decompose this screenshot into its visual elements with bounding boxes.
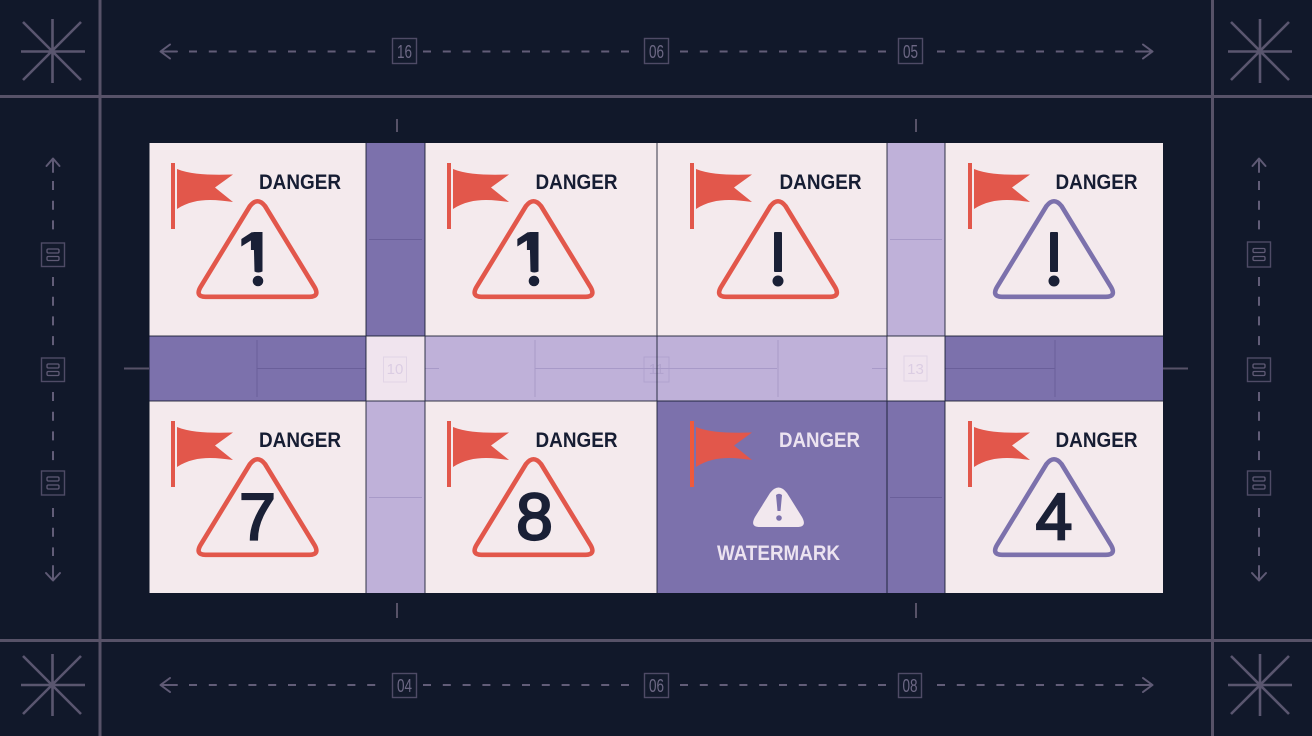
gutter: upper right light [887, 143, 945, 336]
junction: right [887, 336, 945, 401]
icon: warning triangle [995, 201, 1113, 297]
band: centre light [425, 336, 887, 401]
heading: DANGER [1056, 429, 1138, 452]
label box 05: 05 [903, 42, 918, 62]
label box upper right [1248, 242, 1270, 267]
label box 06 lower: 06 [649, 676, 664, 696]
right dimension line [1248, 158, 1270, 580]
icon: flag [690, 421, 752, 487]
gutter: lower left light [366, 401, 425, 593]
gutter: upper left dark [366, 143, 425, 336]
top dimension line [160, 38, 1152, 64]
numeral 4: 4 [1036, 480, 1072, 554]
icon: flag [968, 163, 1030, 229]
label box 08: 08 [902, 676, 918, 696]
icon: star top-left [21, 19, 85, 83]
junction: left [366, 336, 425, 401]
icon: filled warning [753, 488, 804, 527]
left dimension line [42, 158, 64, 580]
exclamation mark [1048, 232, 1060, 286]
card 2: danger 1 [447, 163, 618, 297]
card 3: danger exclamation [690, 163, 862, 303]
bottom dimension line [160, 674, 1152, 698]
icon: flag [447, 163, 509, 229]
icon: star top-right [1228, 19, 1292, 83]
card 7: watermark [690, 421, 860, 565]
exclamation mark [772, 232, 784, 286]
card 4: danger exclamation purple [968, 163, 1138, 303]
band: right dark [945, 336, 1163, 401]
icon: flag [968, 421, 1030, 487]
faint label 13 [904, 356, 927, 381]
heading: DANGER [779, 429, 860, 452]
numeral 1 [241, 232, 264, 286]
icon: warning triangle [475, 201, 592, 297]
exclamation mark: ! [767, 217, 789, 303]
numeral 1: 1 [514, 221, 546, 286]
exclamation mark: ! [1043, 217, 1065, 303]
numeral 7: 7 [239, 480, 276, 554]
watermark label: WATERMARK [717, 542, 840, 565]
heading: DANGER [259, 429, 341, 452]
icon: warning triangle [719, 201, 837, 297]
crop ticks [124, 119, 1188, 618]
icon: warning triangle [199, 201, 316, 297]
label box middle [42, 358, 64, 382]
label box lower right [1248, 471, 1270, 495]
card 8: danger 4 [968, 421, 1138, 555]
panel: grid backing [150, 143, 1163, 593]
card 1: danger 1 [171, 163, 341, 297]
icon: flag [690, 163, 752, 229]
label box middle right [1248, 358, 1270, 382]
faint label 11 [644, 357, 669, 382]
label box 06: 06 [649, 42, 664, 62]
grid cut lines [150, 143, 1163, 593]
faint label 13: 13 [907, 361, 924, 378]
heading: DANGER [1056, 171, 1138, 194]
label box upper [42, 243, 64, 266]
heading: DANGER [536, 171, 618, 194]
icon: warning triangle [995, 459, 1113, 555]
numeral 1: 1 [238, 221, 270, 286]
faint label 10 [384, 357, 406, 382]
icon: flag [171, 163, 233, 229]
numeral 8: 8 [516, 480, 553, 554]
heading: DANGER [780, 171, 862, 194]
label box 06 [644, 38, 668, 64]
card background: watermark [657, 401, 887, 593]
label box 04 [392, 674, 416, 698]
card 6: danger 8 [447, 421, 618, 555]
heading: DANGER [536, 429, 618, 452]
faint label 11: 11 [649, 361, 664, 378]
label box 16 [392, 38, 416, 64]
icon: warning triangle [475, 459, 592, 555]
band: left dark [150, 336, 366, 401]
icon: flag [171, 421, 233, 487]
label box 04: 04 [397, 676, 412, 696]
gutter: lower right dark [887, 401, 945, 593]
icon: star bottom-left [21, 654, 85, 716]
band guide lines [257, 240, 1055, 498]
icon: star bottom-right [1228, 654, 1292, 716]
label box 06 lower [644, 674, 668, 698]
label box 16: 16 [397, 42, 412, 62]
heading: DANGER [259, 171, 341, 194]
card 5: danger 7 [171, 421, 341, 555]
numeral 1 [517, 232, 540, 286]
label box lower [42, 471, 64, 495]
icon: warning triangle [199, 459, 316, 555]
label box 05 [898, 38, 922, 64]
icon: flag [447, 421, 509, 487]
label box 08 [898, 674, 922, 698]
faint label 10: 10 [387, 361, 403, 378]
